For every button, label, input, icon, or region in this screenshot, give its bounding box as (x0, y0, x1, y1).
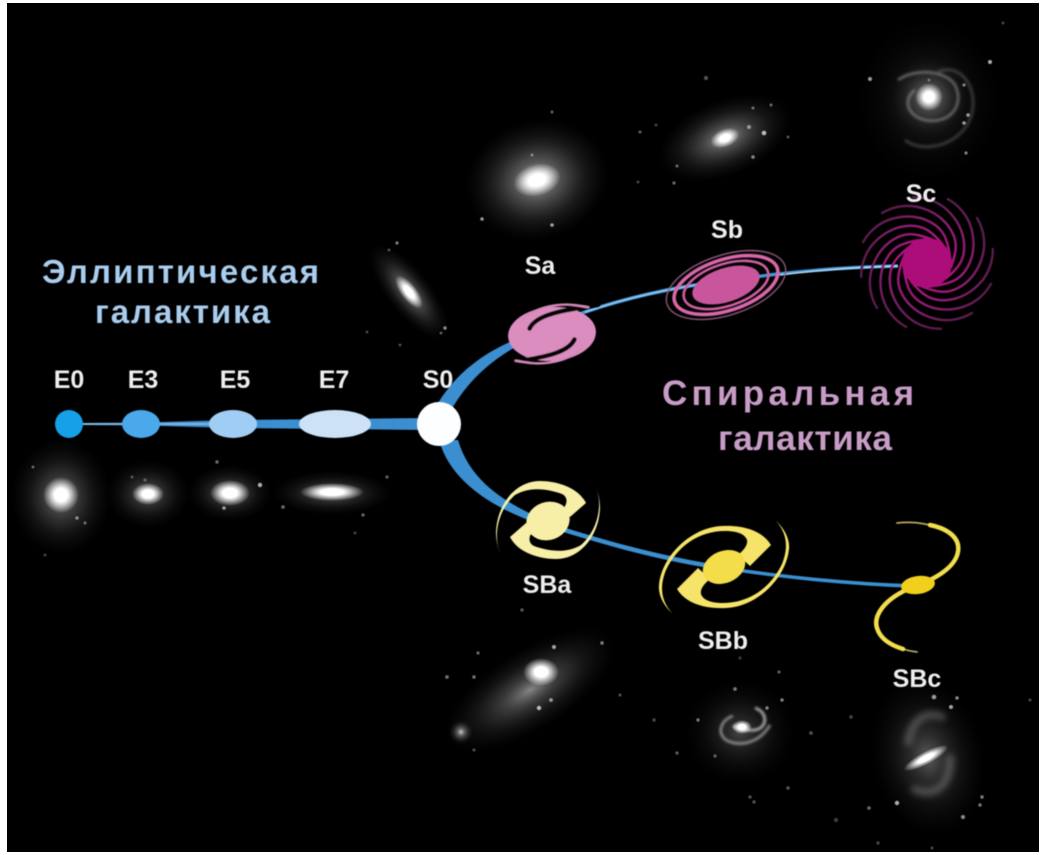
photo: SBc galaxy (857, 667, 999, 847)
stage: E5 (209, 366, 257, 438)
stage: E0 (54, 366, 84, 438)
heading: elliptical galaxy: Эллиптическая (42, 253, 319, 290)
branch: elliptical stem (69, 418, 425, 430)
heading: elliptical galaxy: галактика (95, 293, 271, 330)
icon: SBb barred spiral (659, 521, 789, 613)
branch: lower barred spiral (439, 440, 912, 586)
label: E7: E7 (319, 366, 349, 394)
label: S0: S0 (423, 366, 453, 394)
photo: E5 galaxy (188, 465, 272, 521)
stage: S0 (417, 366, 461, 446)
stage: E7 (299, 366, 371, 438)
heading: spiral galaxy: галактика (718, 419, 893, 458)
stage: E3 (122, 366, 160, 438)
heading: spiral galaxy: Спиральная (662, 374, 914, 413)
label: E5: E5 (220, 366, 250, 394)
photo: E0 galaxy (11, 439, 111, 555)
marker: S0 (417, 402, 461, 446)
marker: E3 (122, 410, 160, 438)
icon: Sa spiral (502, 302, 602, 366)
icon: Sb spiral (658, 237, 794, 333)
marker: E5 (209, 410, 257, 438)
photo: S0 galaxy (356, 233, 462, 351)
label: Sc: Sc (906, 180, 936, 208)
label: Sa: Sa (525, 252, 556, 280)
marker: E7 (299, 410, 371, 438)
Hubble tuning fork branches (69, 266, 912, 586)
label: E0: E0 (54, 366, 84, 394)
icon: SBc barred spiral (876, 522, 958, 652)
photo: Sa galaxy (452, 103, 622, 257)
photo: E3 galaxy (106, 460, 190, 528)
label: SBb: SBb (698, 627, 748, 655)
photo: Sc galaxy (857, 18, 1001, 182)
photo: E7 galaxy (272, 471, 392, 515)
photo: SBb galaxy (685, 680, 795, 784)
photo: SBa galaxy (426, 604, 634, 776)
branch: upper spiral (435, 266, 898, 414)
label: SBc: SBc (893, 665, 941, 693)
icon: Sc spiral (855, 191, 999, 335)
icon: SBa barred spiral (496, 481, 600, 559)
photo: Sb galaxy (646, 77, 804, 199)
label: E3: E3 (128, 366, 158, 394)
label: SBa: SBa (523, 571, 572, 599)
label: Sb: Sb (711, 216, 743, 244)
marker: E0 (55, 410, 83, 438)
